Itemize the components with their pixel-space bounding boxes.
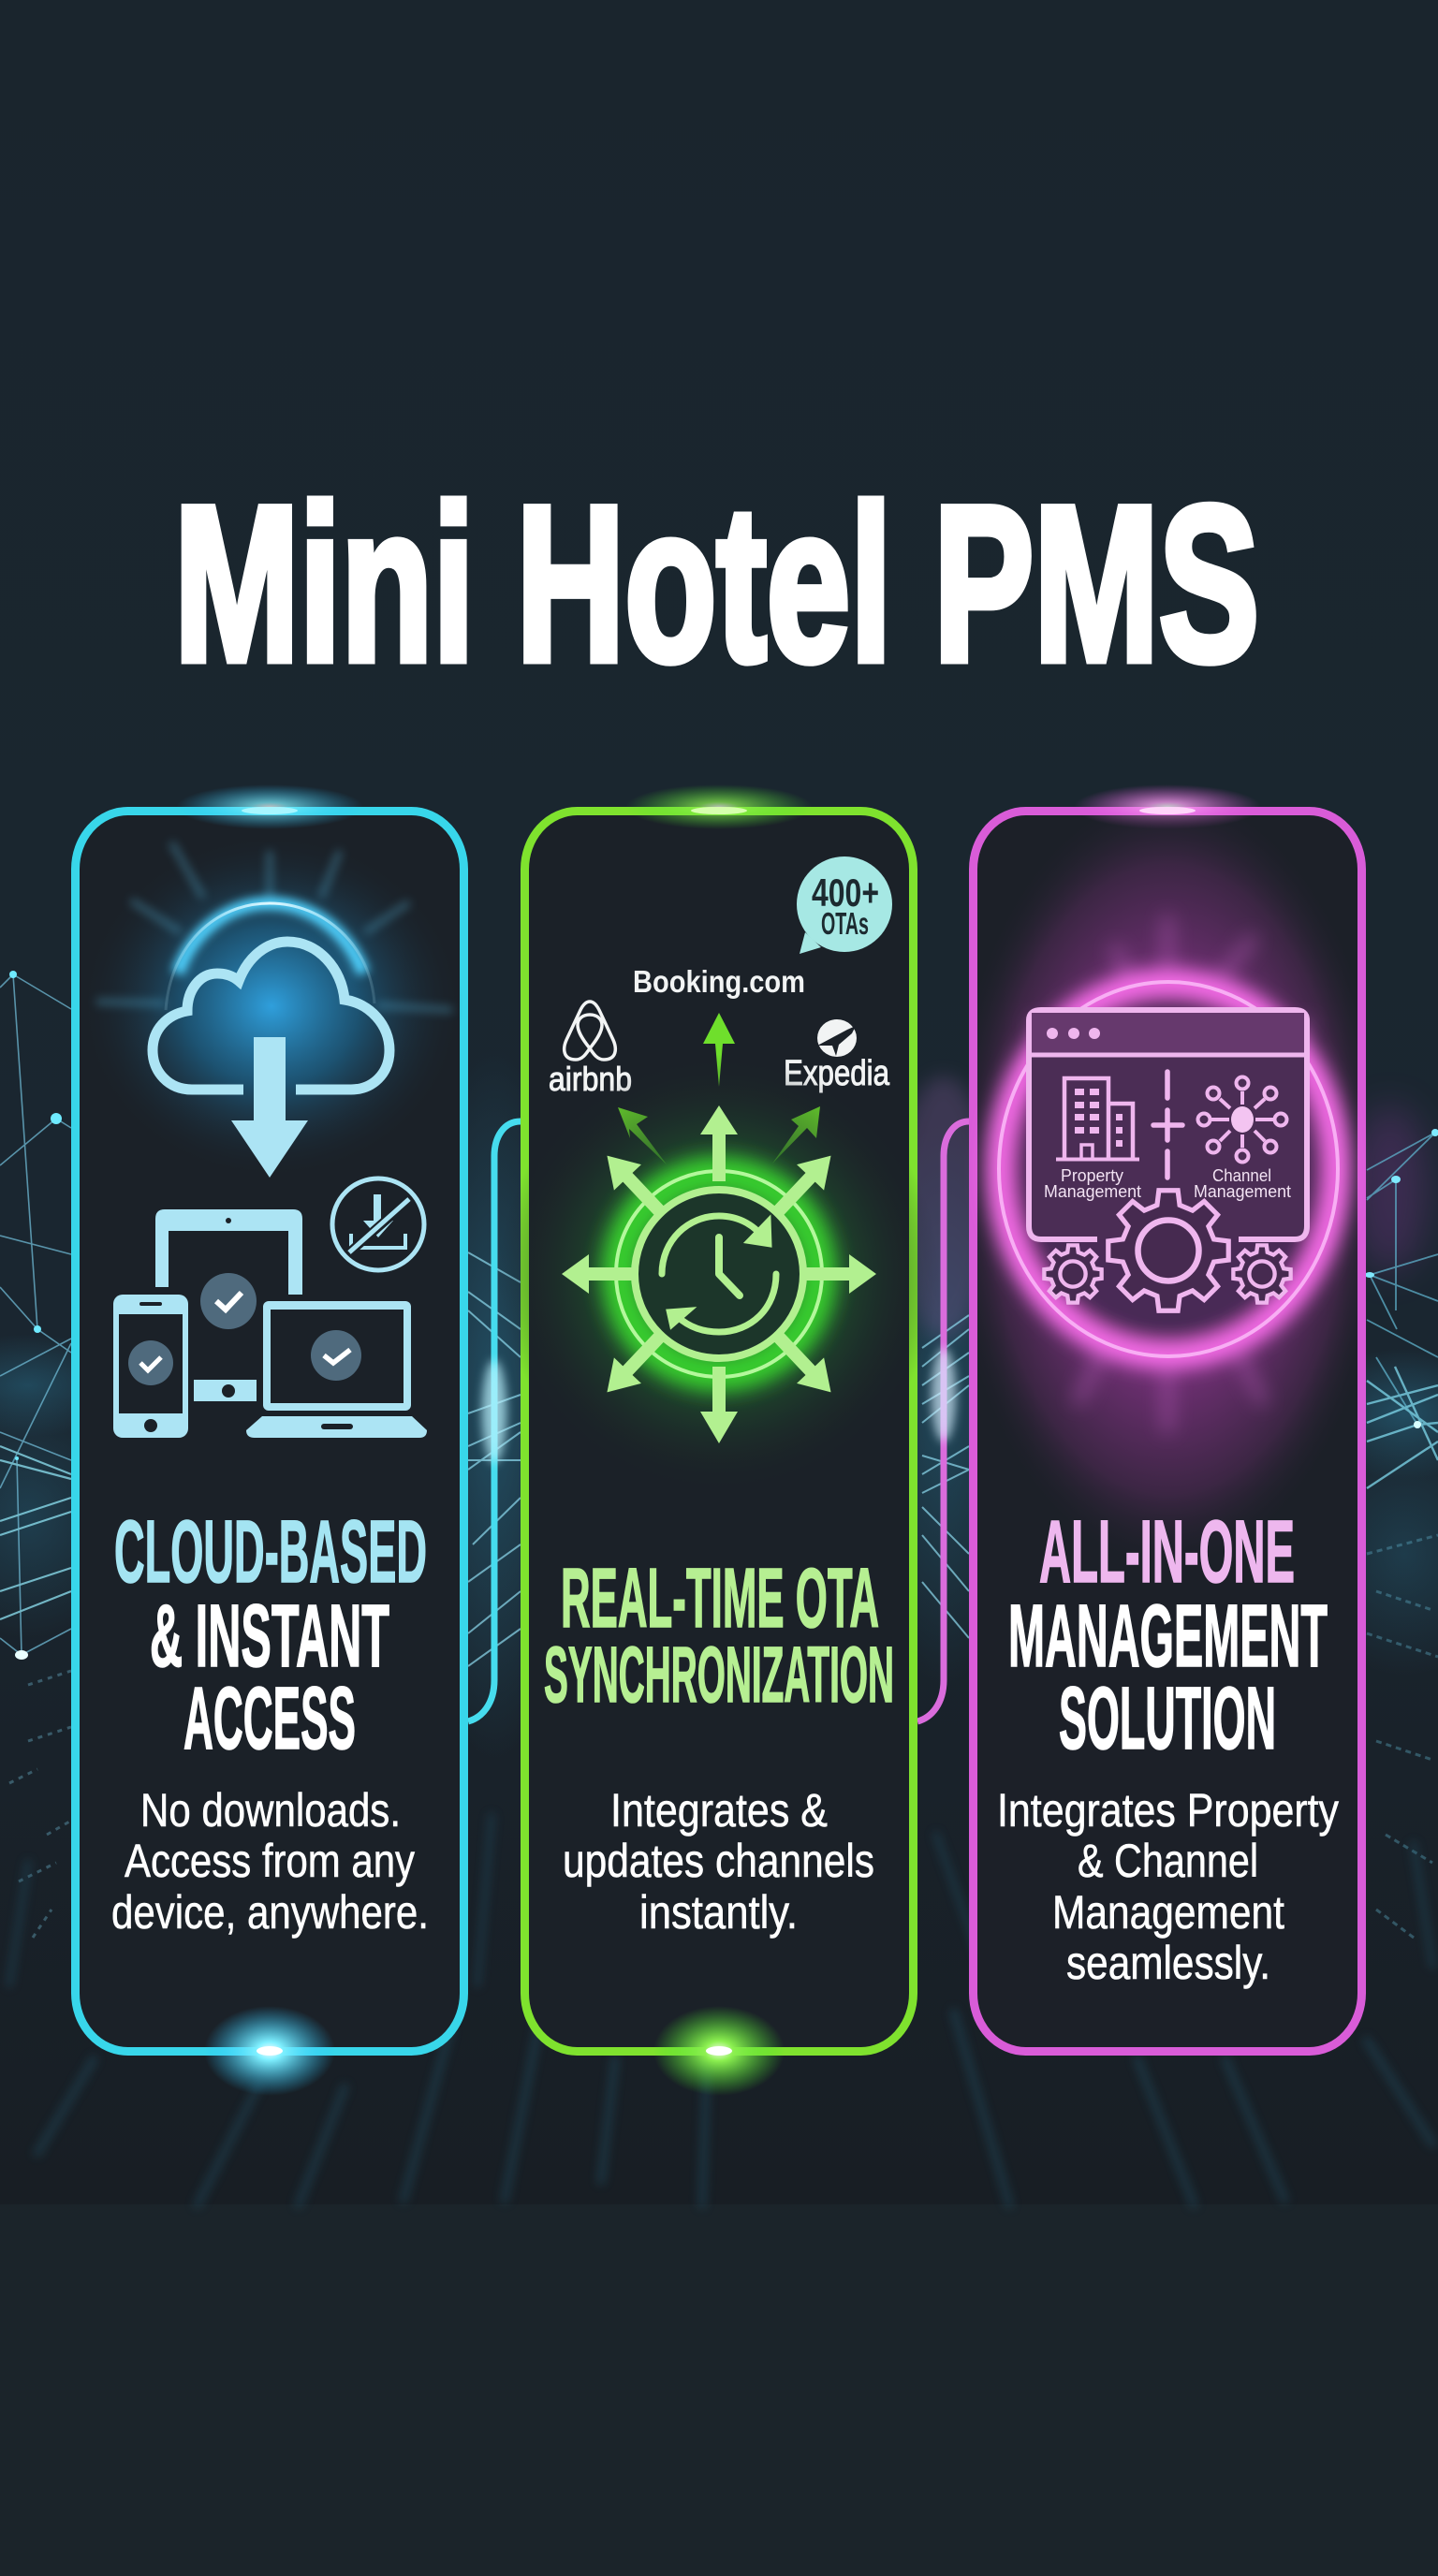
icon: no download	[332, 1178, 424, 1270]
icon: app window	[1029, 1010, 1307, 1239]
icon: phone	[113, 1295, 188, 1438]
network nodes left	[9, 971, 62, 1660]
icon: laptop	[246, 1301, 427, 1438]
icon: cloud halo	[80, 833, 463, 1179]
heading	[114, 1502, 427, 1768]
icon: cloud download	[153, 942, 389, 1178]
panel: cloud-based: CLOUD-BASED	[114, 1502, 427, 1602]
icon: glowing ring	[977, 815, 1357, 1533]
panel: real-time OTA: SYNCHRONIZATION	[544, 1631, 894, 1719]
icon labels: Channel	[1212, 1166, 1271, 1185]
icon: OTA bubble: OTAs	[821, 906, 869, 941]
green logo arrows	[618, 1013, 820, 1164]
panel: cloud-based	[75, 784, 464, 2096]
heading: & INSTANT	[150, 1587, 389, 1686]
logo: Booking.com: Booking.com	[633, 964, 805, 999]
logo: airbnb	[549, 1002, 632, 1098]
description: Integrates Property	[997, 1784, 1339, 1837]
icon: radial arrows	[562, 1105, 876, 1443]
heading: REAL-TIME OTA	[561, 1552, 879, 1646]
card frame	[974, 811, 1361, 2052]
card glow top	[1074, 784, 1261, 829]
icon labels: Management	[1044, 1182, 1141, 1201]
icon: OTA bubble	[797, 856, 892, 954]
connector: sync to management	[917, 1121, 969, 1721]
network lines left	[0, 974, 71, 1938]
icon: tablet	[155, 1209, 302, 1401]
description: updates channels	[563, 1835, 874, 1887]
icon: OTA bubble: 400+	[812, 871, 879, 915]
description: device, anywhere.	[111, 1886, 429, 1939]
icon: plus divider	[1153, 1072, 1182, 1178]
icon: building	[1056, 1078, 1139, 1159]
icon labels: Property	[1061, 1166, 1123, 1185]
icon: sync clock	[635, 1190, 803, 1358]
card glow bottom	[653, 2006, 785, 2096]
card glow top	[625, 784, 813, 829]
description: Management	[1052, 1886, 1284, 1939]
connector: cloud to sync	[468, 1121, 521, 1721]
icon: sync hub glow	[499, 1054, 939, 1494]
logo: airbnb: airbnb	[549, 1060, 632, 1098]
card glow bottom	[204, 2006, 335, 2096]
icon labels	[1044, 1166, 1291, 1201]
heading	[1008, 1502, 1328, 1768]
network nodes right	[1365, 1129, 1438, 1428]
bottom light streaks	[9, 1816, 1432, 2204]
description: & Channel	[1078, 1835, 1258, 1887]
icon: gears	[1044, 1191, 1291, 1310]
logo: Expedia	[784, 1019, 890, 1093]
description: No downloads.	[140, 1784, 401, 1837]
icon labels: Management	[1194, 1182, 1291, 1201]
description	[111, 1784, 429, 1939]
network lines in gaps	[468, 1252, 969, 1666]
icon: channel network	[1198, 1076, 1286, 1163]
card glow top	[176, 784, 363, 829]
description	[563, 1784, 874, 1939]
heading: ACCESS	[183, 1669, 356, 1768]
heading	[544, 1552, 894, 1719]
logo: Expedia: Expedia	[784, 1054, 890, 1093]
panel: all-in-one	[969, 785, 1366, 2056]
description: instantly.	[639, 1886, 798, 1939]
description: seamlessly.	[1066, 1937, 1270, 1989]
description: Access from any	[125, 1835, 415, 1887]
card frame	[524, 811, 914, 2052]
panel: real-time OTA	[499, 784, 939, 2096]
description: Integrates &	[610, 1784, 828, 1837]
network lines right	[1367, 1133, 1438, 1938]
description	[997, 1784, 1339, 1989]
card frame	[75, 811, 464, 2052]
